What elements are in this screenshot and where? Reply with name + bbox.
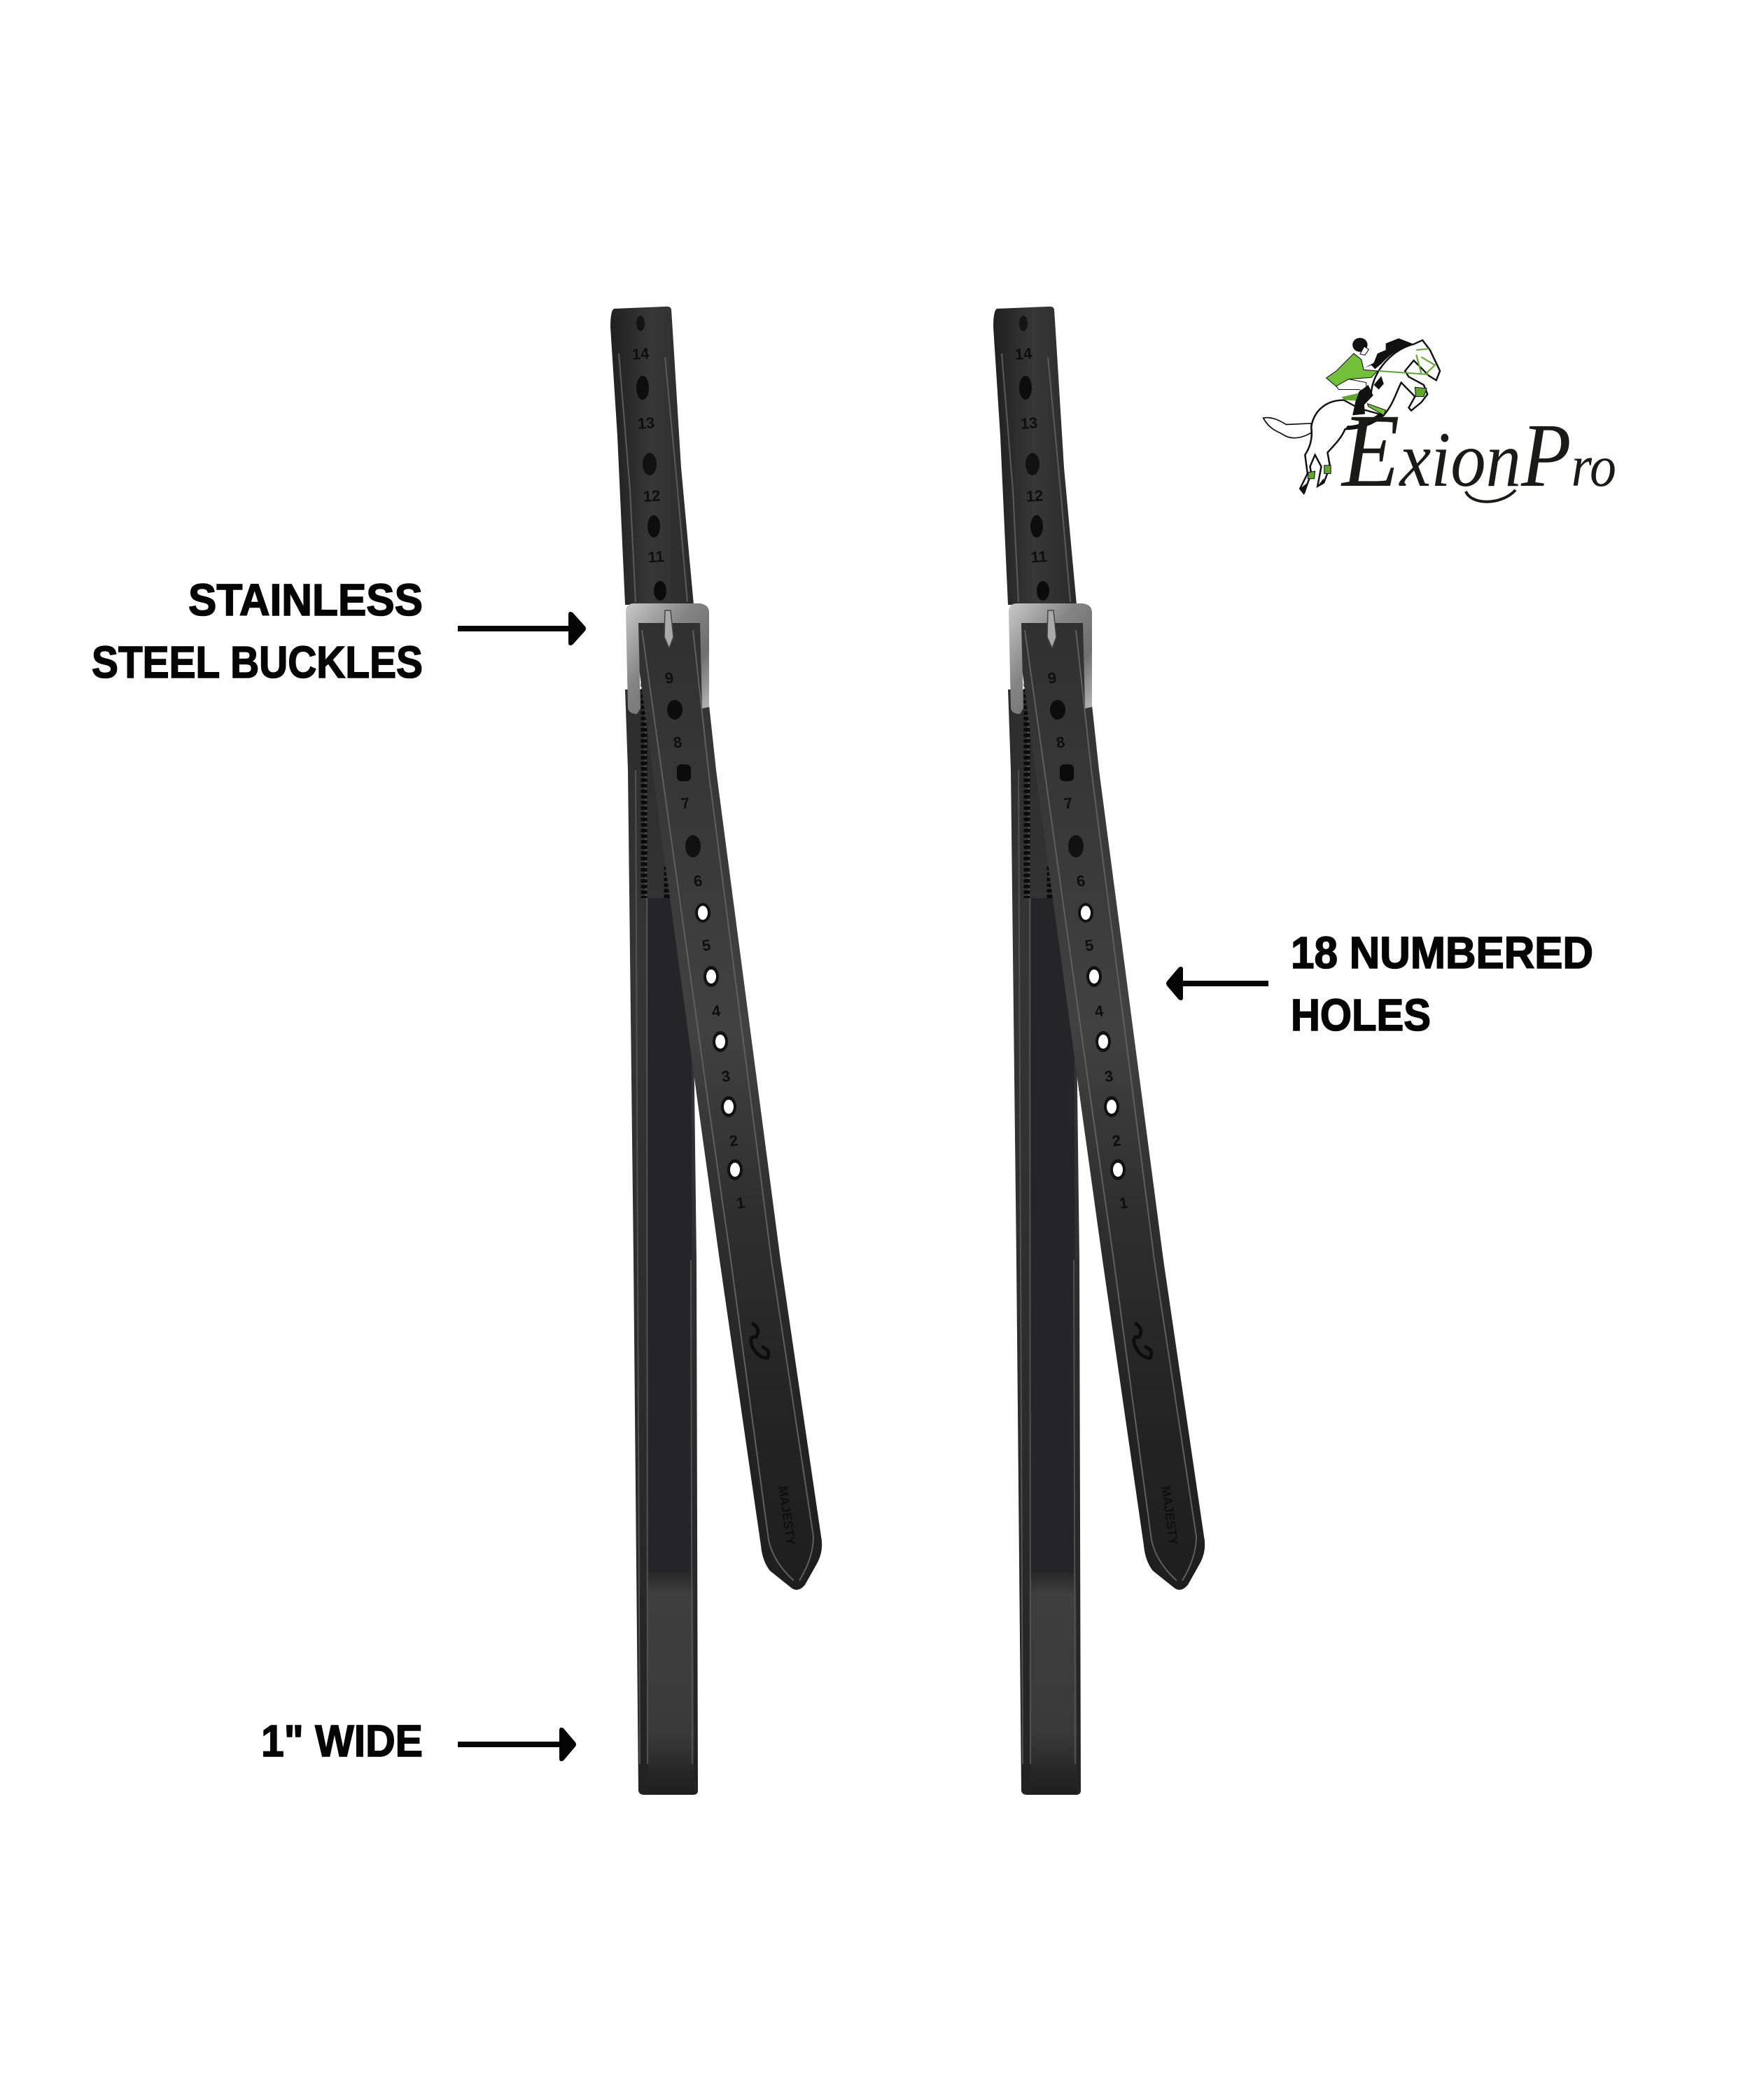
logo wordmark: ExionPro [1340,393,1616,509]
upper strap with holes: 11 [1030,547,1048,566]
icon: horse and rider [1264,338,1440,493]
upper strap with holes: 14 [631,344,650,363]
front strap with numbered holes [1016,621,1205,1590]
arrow: to holes [1166,967,1268,1000]
wordmark swash [1466,490,1516,502]
front strap with numbered holes: 8 [1055,733,1066,752]
label: 18 numbered holes: HOLES [1291,990,1431,1040]
upper strap with holes: 12 [1026,486,1044,505]
ExionPro logo [1264,338,1616,509]
upper strap with holes: 14 [1014,344,1033,363]
front strap with numbered holes: 9 [1046,668,1058,687]
back strap [1008,690,1081,1795]
front strap with numbered holes: 3 [720,1067,732,1086]
front strap with numbered holes: MAJESTY [1158,1485,1181,1546]
front strap with numbered holes: 5 [701,936,712,955]
front strap with numbered holes: 9 [664,668,675,687]
front strap with numbered holes: 6 [692,872,704,890]
front strap with numbered holes: 4 [1093,1002,1105,1021]
front strap with numbered holes: 2 [1111,1131,1122,1150]
label: stainless steel buckles: STEEL BUCKLES [92,637,423,687]
label: 1 inch wide: 1" WIDE [261,1716,423,1766]
stitching [644,672,667,898]
label: stainless steel buckles: STAINLESS [188,575,423,625]
upper strap with holes: 12 [643,486,661,505]
label: 18 numbered holes: 18 NUMBERED [1291,927,1593,978]
front strap with numbered holes: 2 [728,1131,739,1150]
front strap with numbered holes: MAJESTY [776,1485,798,1546]
front strap with numbered holes: 4 [710,1002,722,1021]
stirrup leather: right [993,307,1205,1795]
stitching [1027,672,1050,898]
front strap with numbered holes: 6 [1075,872,1086,890]
upper strap with holes [610,307,694,605]
upper strap with holes: 13 [1020,414,1038,433]
upper strap with holes: 13 [637,414,655,433]
front strap with numbered holes: 8 [672,733,683,752]
back strap [625,690,698,1795]
arrow: to strap width [458,1728,576,1761]
front strap with numbered holes: 3 [1103,1067,1114,1086]
front strap with numbered holes: 7 [1063,794,1074,813]
front strap with numbered holes: 1 [1118,1194,1129,1212]
arrow: to buckle [458,612,586,645]
label: 18 numbered holes [1291,927,1593,1040]
stainless steel buckle [626,603,709,714]
label: stainless steel buckles [92,575,423,687]
upper strap with holes: 11 [648,547,665,566]
front strap with numbered holes: 5 [1084,936,1095,955]
upper strap with holes [993,307,1077,605]
stirrup leather: left [610,307,822,1795]
stainless steel buckle [1009,603,1092,714]
front strap with numbered holes: 1 [735,1194,746,1212]
front strap with numbered holes: 7 [680,794,691,813]
front strap with numbered holes [633,621,822,1590]
